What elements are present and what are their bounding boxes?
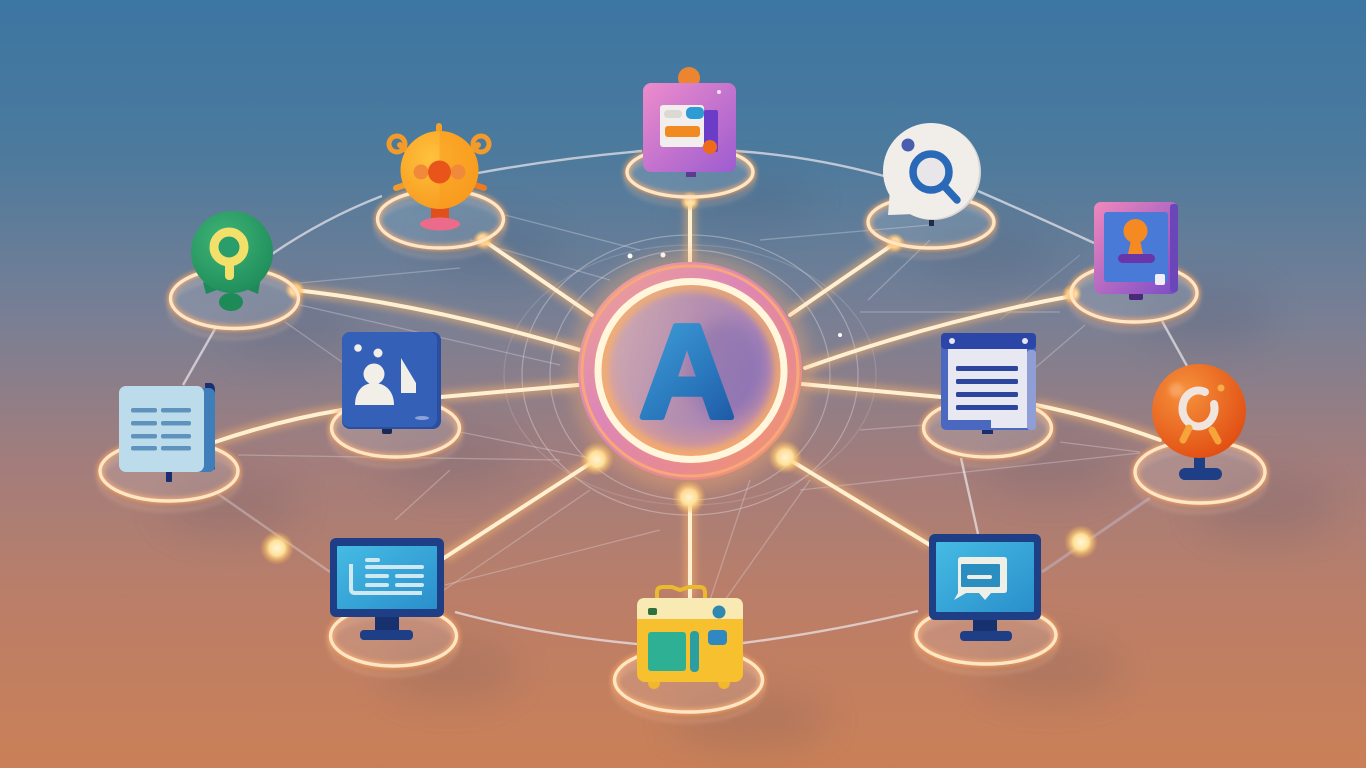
icon: light blue text card [119,383,215,482]
ghost ring shadows [99,155,1266,721]
icon: sun gadget [389,123,489,230]
icon: monitor with chat bubble [929,534,1041,641]
icon: orange globe [1152,364,1246,480]
icon: monitor with list [330,538,444,640]
icon: document window [941,333,1036,434]
icon: search bubble [883,123,981,226]
platform rings [99,147,1266,721]
letter A: A [639,298,735,445]
icon: yellow case [637,587,743,689]
outer thin connectors between nodes [183,151,1187,644]
icon: purple window card [643,67,736,177]
bright spokes glow [215,197,1160,598]
icon: green pin [191,211,273,311]
icon: profile stamp card [1094,202,1178,300]
icon: blue user card [342,332,441,434]
thin web lines [238,215,1140,600]
ring glow [100,147,1265,712]
ring strokes [100,147,1265,712]
central hub with letter A [570,251,810,491]
drop shadows beneath nodes [160,175,1335,750]
bright spokes from hub to nodes [215,197,1160,598]
glowing junction dots [260,191,1098,565]
concentric rings around hub [504,235,876,515]
